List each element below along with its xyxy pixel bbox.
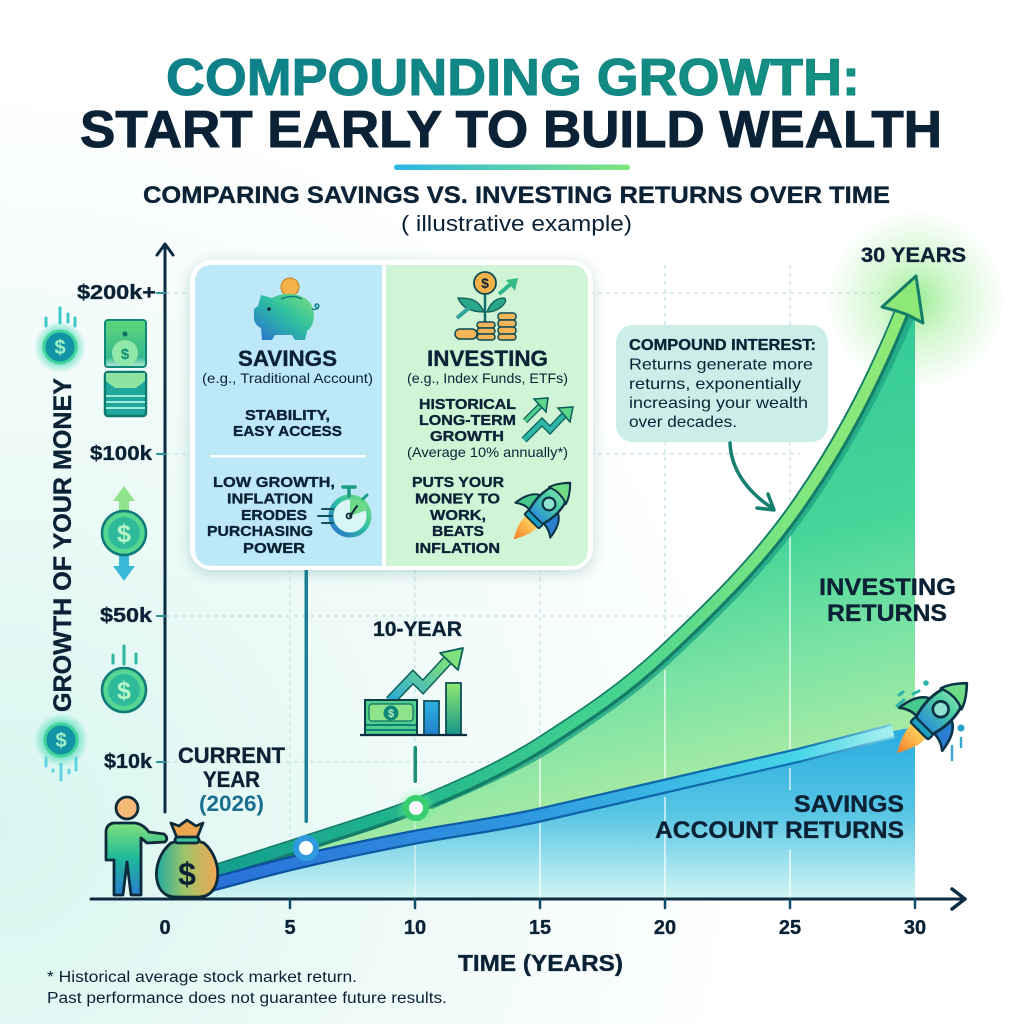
icon: rocket in panel [496, 466, 587, 557]
10: 10 [404, 917, 426, 939]
icon: coin with rising lines top left [34, 308, 86, 373]
investing curve shadow [430, 318, 910, 806]
footnote [47, 969, 447, 1007]
investing arrow head [882, 276, 923, 323]
marker: savings point [296, 838, 316, 858]
line: MONEY TO [415, 490, 500, 508]
icon: coin with up and down arrows [102, 486, 146, 581]
investing background [386, 265, 588, 566]
subtitle note: ( illustrative example) [401, 211, 632, 236]
icon: person [106, 797, 167, 895]
line: INFLATION [227, 490, 313, 508]
icon: banknote stack: $ [121, 346, 130, 363]
x axis [91, 889, 965, 909]
year: YEAR [203, 767, 260, 792]
icon: banknote stack [105, 320, 146, 416]
title line 1: COMPOUNDING GROWTH: [166, 49, 860, 107]
investing curve highlight [200, 310, 902, 876]
line: HISTORICAL [419, 396, 516, 413]
icon: plant and coins: $ [481, 275, 489, 291]
investing curve [200, 312, 902, 877]
investing heading: INVESTING [427, 346, 548, 371]
arrow: callout to curve [730, 443, 774, 510]
savings returns area [205, 727, 915, 899]
line: ACCOUNT RETURNS [655, 817, 904, 844]
icon: coin with falling lines [34, 713, 88, 780]
title underline [394, 164, 630, 170]
investing benefit [419, 396, 516, 445]
30: 30 [904, 917, 926, 939]
line: RETURNS [827, 600, 947, 627]
callout box [616, 325, 828, 442]
grid [166, 265, 880, 899]
line: increasing your wealth [629, 395, 808, 412]
x axis labels [159, 917, 926, 939]
line: ERODES [241, 507, 307, 524]
title [80, 49, 942, 159]
icon: rocket on savings line [875, 662, 988, 775]
investing drawback [412, 474, 504, 557]
20: 20 [654, 917, 676, 939]
line: INVESTING [819, 574, 956, 601]
icon: stopwatch [318, 487, 369, 535]
line: LOW GROWTH, [213, 474, 335, 491]
callout text [629, 356, 813, 431]
panel: savings [195, 265, 382, 566]
icon: piggy bank [254, 278, 319, 340]
footnote line 1: * Historical average stock market return. [47, 969, 357, 986]
label: 10-year: 10-YEAR [373, 618, 462, 641]
investing subheading: (e.g., Index Funds, ETFs) [407, 370, 568, 386]
y axis labels [77, 282, 156, 773]
savings line [205, 731, 893, 886]
savings heading: SAVINGS [238, 346, 337, 371]
icon: coin with rising lines top left: $ [54, 337, 66, 359]
0: 0 [159, 917, 171, 939]
line: PUTS YOUR [412, 474, 504, 491]
label: 30 years: 30 YEARS [861, 244, 966, 267]
icon: coin with falling lines: $ [55, 730, 67, 752]
icon: coin with lines: $ [117, 677, 131, 705]
subtitle [143, 182, 890, 236]
footnote line 2: Past performance does not guarantee future results. [47, 990, 447, 1007]
x axis title: TIME (YEARS) [458, 950, 623, 976]
icon: 10-year money and bars: $ [388, 708, 394, 720]
2026: (2026) [199, 791, 264, 816]
label 200k: $200k+ [77, 282, 156, 304]
icon: growth arrows [524, 398, 573, 440]
5: 5 [284, 917, 296, 939]
line: STABILITY, [245, 407, 330, 424]
savings line highlight [205, 731, 893, 886]
label 10k: $10k [104, 751, 153, 773]
line: PURCHASING [207, 523, 313, 540]
y axis title: GROWTH OF YOUR MONEY [49, 378, 77, 712]
15: 15 [529, 917, 551, 939]
icon: 10-year money and bars [360, 648, 467, 735]
connector: savings marker [304, 568, 308, 823]
line: SAVINGS [794, 791, 904, 818]
savings drawback [207, 474, 335, 557]
comparison panel [190, 260, 593, 570]
line: returns, exponentially [629, 376, 801, 393]
label 50k: $50k [100, 605, 153, 627]
label: investing returns [819, 574, 956, 627]
icon: plant and coins [455, 272, 518, 340]
line: LONG-TERM [419, 412, 516, 429]
icon: coin with up and down arrows: $ [117, 520, 131, 548]
icon: money bag: $ [178, 856, 196, 892]
callout heading: COMPOUND INTEREST: [629, 337, 816, 354]
white year lines [415, 530, 790, 899]
line: POWER [243, 540, 305, 557]
glow at curve top [826, 210, 1006, 390]
label: savings returns [655, 791, 904, 844]
25: 25 [779, 917, 801, 939]
subtitle main: COMPARING SAVINGS VS. INVESTING RETURNS OVER TIME [143, 182, 890, 209]
y axis [157, 244, 173, 812]
marker: 10-year point [395, 788, 437, 830]
line: WORK, [430, 507, 486, 524]
chart: growth curves [200, 276, 923, 899]
investing returns area [300, 305, 915, 860]
line: over decades. [629, 414, 737, 431]
savings subheading: (e.g., Traditional Account) [202, 370, 373, 386]
label 100k: $100k [90, 443, 153, 465]
line: EASY ACCESS [233, 423, 342, 440]
panel: investing [386, 265, 588, 566]
line: INFLATION [415, 540, 500, 557]
line: GROWTH [430, 428, 504, 445]
line: Returns generate more [629, 356, 813, 374]
current: CURRENT [178, 743, 286, 768]
connector: 10-year marker [414, 746, 417, 783]
callout: compound interest [616, 325, 828, 442]
investing average: (Average 10% annually*) [407, 444, 568, 460]
icon: coin with lines [102, 646, 146, 712]
savings background [195, 265, 382, 566]
divider [210, 455, 366, 458]
panel frame [190, 260, 593, 570]
label: current year [178, 743, 286, 816]
icon: money bag [156, 820, 218, 897]
savings benefit [233, 407, 342, 440]
title line 2: START EARLY TO BUILD WEALTH [80, 101, 942, 159]
line: BEATS [432, 523, 484, 540]
